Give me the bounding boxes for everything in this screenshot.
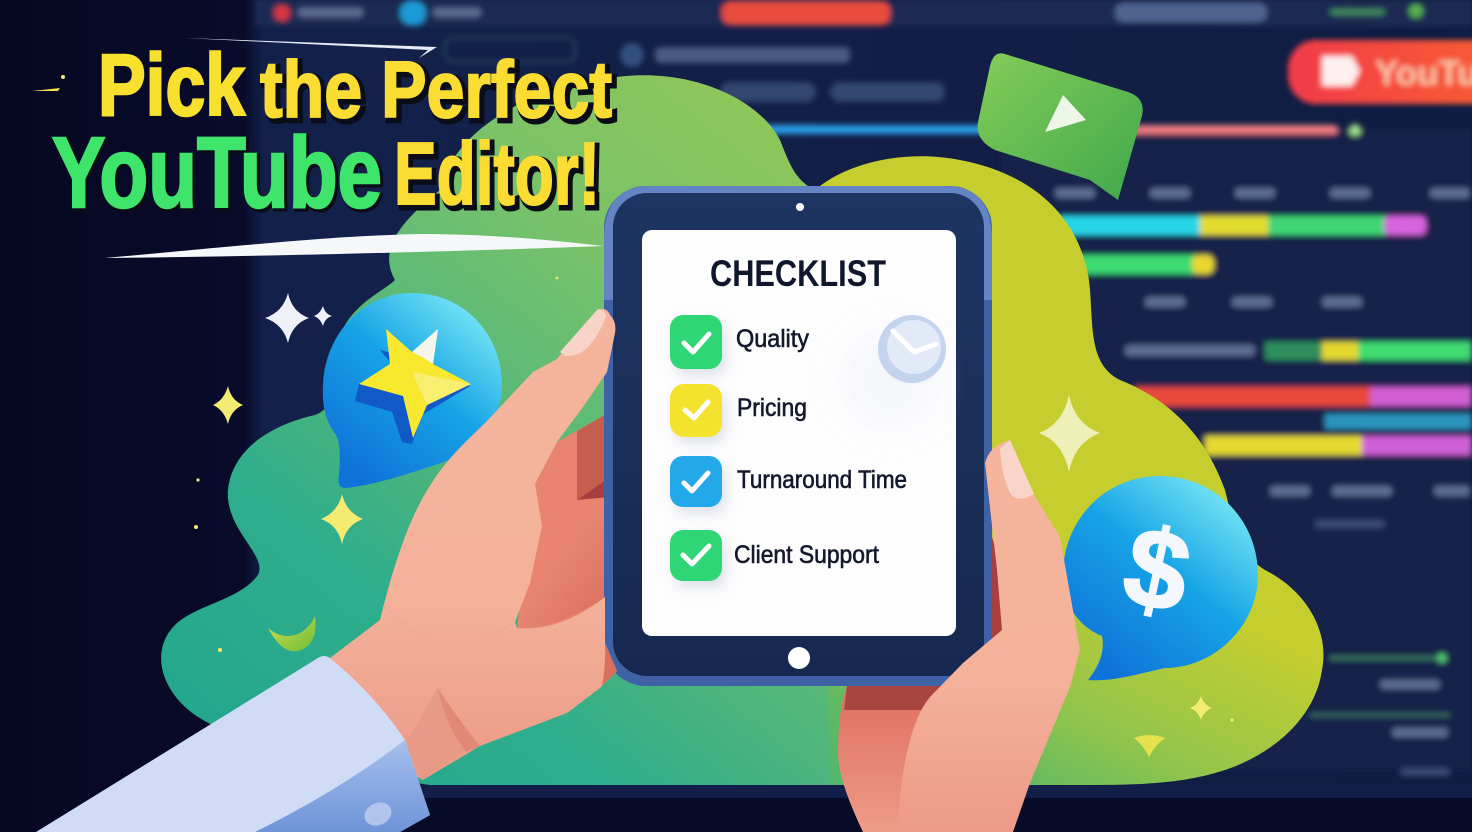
- red fingers behind tablet: [517, 412, 610, 640]
- item: client support: Client Support: [734, 541, 879, 569]
- item: quality: [670, 315, 809, 376]
- swoosh top: [185, 38, 437, 58]
- icon: dollar sign: $: [1114, 502, 1201, 637]
- cuff button: [361, 798, 395, 830]
- swoosh dash: [32, 88, 60, 91]
- the Perfect: the Perfect: [260, 45, 612, 134]
- palm crease: [383, 606, 515, 646]
- tablet grip shadow: [602, 643, 617, 686]
- right hand fingers: [898, 440, 1080, 832]
- dollar speech bubble: [1063, 476, 1258, 680]
- star speech bubble: [323, 293, 502, 488]
- leaf: green: [268, 616, 316, 651]
- swoosh bottom: [105, 234, 603, 258]
- sparkle: yellow bottom right: [1190, 696, 1212, 720]
- camera dot: [796, 203, 804, 211]
- icon: star: [355, 329, 471, 444]
- sparkle: yellow lower: [321, 494, 363, 544]
- YouTube shadow: YouTube: [54, 119, 384, 231]
- right hand back: [838, 686, 1000, 832]
- item: client support: [670, 530, 879, 588]
- shirt sleeve: [36, 656, 430, 832]
- tablet: [604, 186, 992, 686]
- title: [32, 37, 615, 258]
- the Perfect shadow: the Perfect: [263, 48, 615, 137]
- Editor: Editor!: [394, 124, 600, 223]
- screen: [642, 230, 956, 636]
- heading: checklist: CHECKLIST: [710, 253, 886, 294]
- play speech bubble: [978, 53, 1143, 200]
- icon: play triangle: [1045, 95, 1086, 132]
- word: Pick: Pick: [98, 37, 245, 134]
- yellow-green cloud right lobe: [815, 156, 1323, 785]
- sparkle: cream right: [1039, 395, 1100, 472]
- small sparkle dots: [61, 75, 1234, 722]
- clock icon: [842, 315, 946, 428]
- thumbnail: [560, 310, 606, 356]
- item: quality: Quality: [736, 325, 809, 353]
- item: pricing: [670, 384, 807, 444]
- YouTube: YouTube: [52, 117, 382, 229]
- leaf: yellow bottom: [1134, 735, 1165, 757]
- Editor shadow: Editor!: [397, 127, 603, 226]
- item: pricing: Pricing: [737, 394, 807, 422]
- wrist creases: [405, 688, 466, 780]
- blurred editor dashboard: [255, 0, 1472, 776]
- sparkle: white large: [265, 293, 309, 343]
- left hand: [330, 309, 617, 780]
- green cloud left lobe: [161, 75, 850, 785]
- item: turnaround time: [670, 456, 907, 514]
- YouTube badge: [1288, 40, 1472, 104]
- sparkle: yellow left: [213, 386, 243, 424]
- home button: [788, 647, 810, 669]
- item: turnaround time: Turnaround Time: [737, 466, 907, 494]
- sparkle: white small: [314, 306, 332, 326]
- bottom strip: [400, 785, 1472, 832]
- thumbnail: [1000, 440, 1034, 499]
